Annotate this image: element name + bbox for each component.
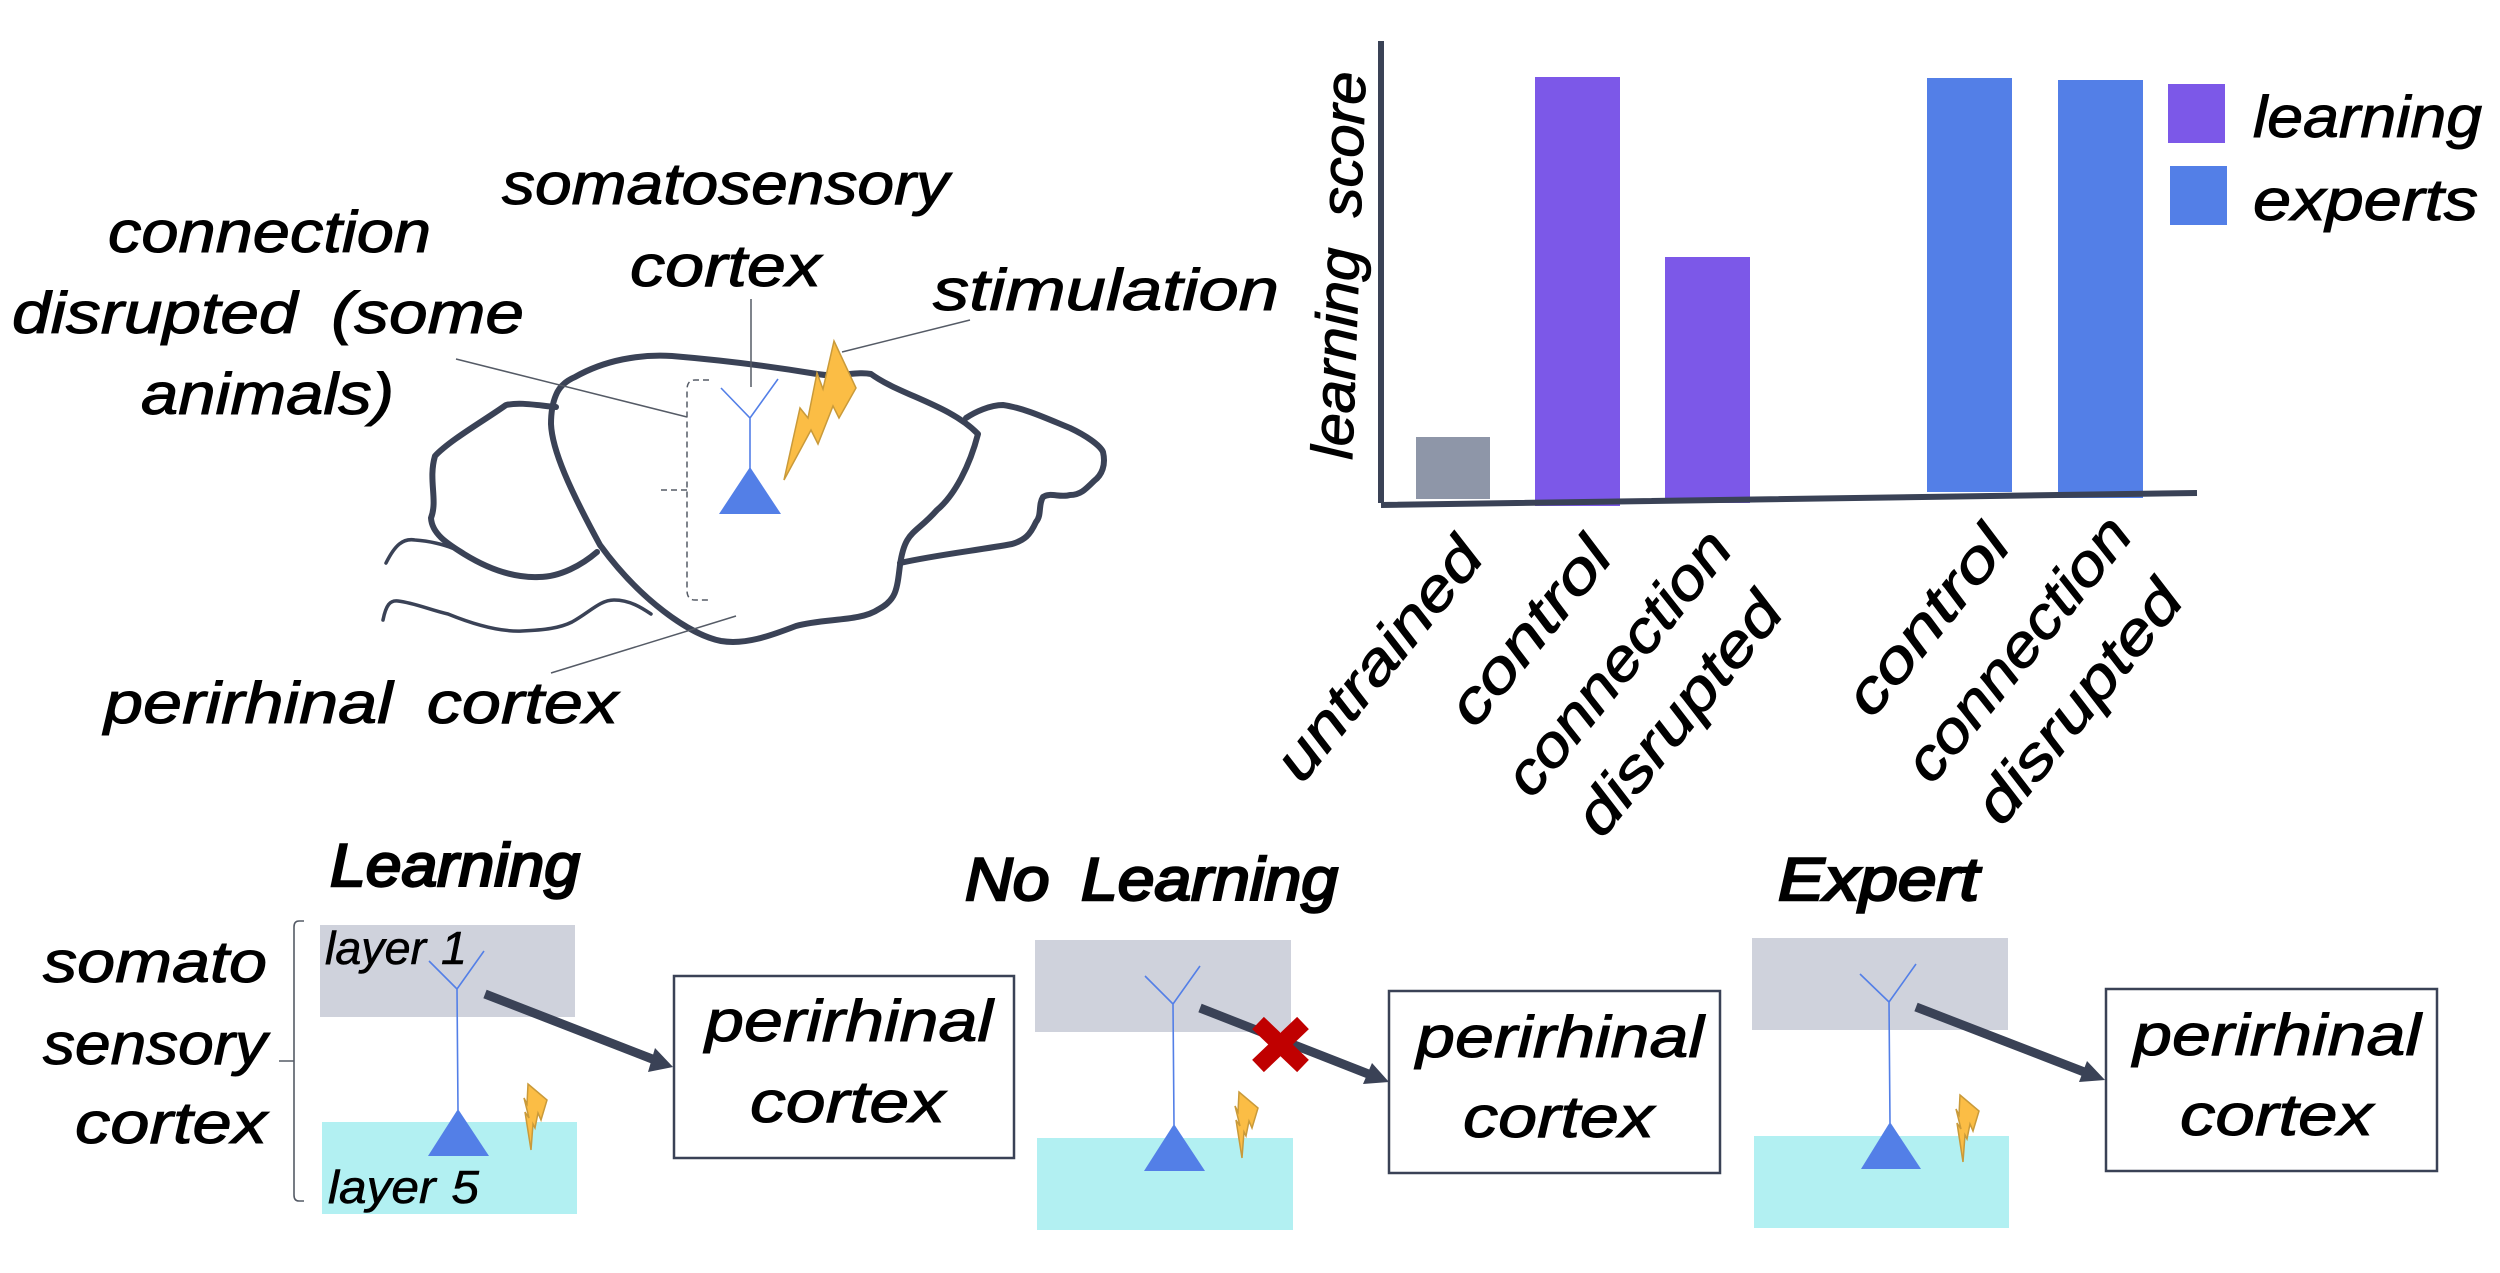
label: somato sensory cortex with bracket bbox=[43, 921, 304, 1201]
label: somatosensory cortex: cortex bbox=[630, 234, 823, 299]
perirhinal cortex box bbox=[674, 976, 1014, 1158]
legend: experts bbox=[2253, 168, 2478, 233]
perirhinal cortex box: cortex bbox=[1463, 1085, 1656, 1150]
label: somato sensory cortex with bracket: somato bbox=[43, 930, 267, 995]
x label: connection disrupted: disrupted bbox=[1562, 579, 1797, 848]
heading: Expert bbox=[1778, 846, 1982, 913]
heading: No Learning bbox=[965, 846, 1338, 913]
neuron bbox=[1860, 964, 1921, 1169]
neuron bbox=[1144, 966, 1205, 1171]
layer 5 band bbox=[1037, 1138, 1293, 1230]
label: somatosensory cortex bbox=[502, 152, 952, 299]
dashed bracket bbox=[659, 380, 709, 600]
panel: learning bbox=[320, 832, 1014, 1214]
arrow bbox=[485, 994, 673, 1072]
x label: control: control bbox=[1435, 523, 1627, 738]
perirhinal cortex box: perirhinal bbox=[2131, 1003, 2424, 1068]
bar: expert connection disrupted bbox=[2058, 80, 2143, 498]
layer 1 label: layer 1 bbox=[325, 922, 467, 974]
legend: learning bbox=[2253, 85, 2482, 150]
label: stimulation: stimulation bbox=[933, 258, 1279, 323]
arrow bbox=[1916, 1007, 2105, 1082]
panel: no learning bbox=[965, 846, 1720, 1230]
layer 1 band bbox=[1752, 938, 2008, 1030]
layer 5 band bbox=[1754, 1136, 2009, 1228]
bar chart bbox=[1262, 41, 2482, 848]
label: somato sensory cortex with bracket: sensory bbox=[43, 1012, 270, 1077]
bar: expert control bbox=[1927, 78, 2012, 492]
bar: learning control bbox=[1535, 77, 1620, 506]
panel: expert bbox=[1752, 846, 2437, 1228]
arrow bbox=[1200, 1008, 1389, 1084]
label: somato sensory cortex with bracket: cortex bbox=[75, 1091, 269, 1156]
x label: connection disrupted bbox=[1492, 517, 1797, 848]
x label: connection disrupted: connection bbox=[1492, 517, 1745, 808]
perirhinal cortex box: perirhinal bbox=[703, 989, 996, 1054]
layer 1 band bbox=[320, 925, 575, 1017]
layer 5 band bbox=[322, 1122, 577, 1214]
layer 5 label: layer 5 bbox=[328, 1161, 479, 1213]
neuron bbox=[428, 951, 489, 1156]
legend bbox=[2168, 84, 2482, 233]
label: somatosensory cortex: somatosensory bbox=[502, 152, 952, 217]
perirhinal cortex box: cortex bbox=[750, 1070, 947, 1135]
icon: red cross bbox=[1258, 1023, 1303, 1066]
heading: Learning bbox=[330, 832, 580, 899]
axes bbox=[1381, 41, 2197, 505]
icon: bolt bbox=[1235, 1092, 1258, 1158]
y axis label: learning score bbox=[1300, 70, 1379, 460]
label: connection disrupted: animals) bbox=[141, 362, 394, 427]
icon: bolt bbox=[524, 1084, 547, 1150]
label: perirhinal cortex: perirhinal cortex bbox=[102, 671, 620, 736]
perirhinal cortex box: perirhinal bbox=[1414, 1005, 1707, 1070]
label: connection disrupted: connection bbox=[108, 200, 431, 265]
panel: brain diagram bbox=[12, 152, 1279, 736]
bar: untrained bbox=[1416, 437, 1490, 499]
bar: learning connection disrupted bbox=[1665, 257, 1750, 503]
icon: stimulation bolt bbox=[784, 341, 856, 480]
x label: untrained: untrained bbox=[1262, 524, 1497, 793]
x label: connection disrupted bbox=[1892, 503, 2197, 836]
perirhinal cortex box: cortex bbox=[2180, 1083, 2375, 1148]
brain outline bbox=[383, 356, 1104, 642]
neuron bbox=[719, 379, 781, 514]
icon: bolt bbox=[1956, 1095, 1979, 1162]
label: connection disrupted: disrupted (some bbox=[12, 281, 524, 346]
layer 1 band bbox=[1035, 940, 1291, 1032]
leader lines bbox=[456, 299, 970, 673]
x label: control: control bbox=[1832, 511, 2025, 728]
x label: connection disrupted: connection bbox=[1892, 503, 2145, 794]
label: connection disrupted bbox=[12, 200, 524, 427]
perirhinal cortex box bbox=[2106, 989, 2437, 1171]
perirhinal cortex box bbox=[1389, 991, 1720, 1173]
x label: connection disrupted: disrupted bbox=[1962, 567, 2197, 836]
